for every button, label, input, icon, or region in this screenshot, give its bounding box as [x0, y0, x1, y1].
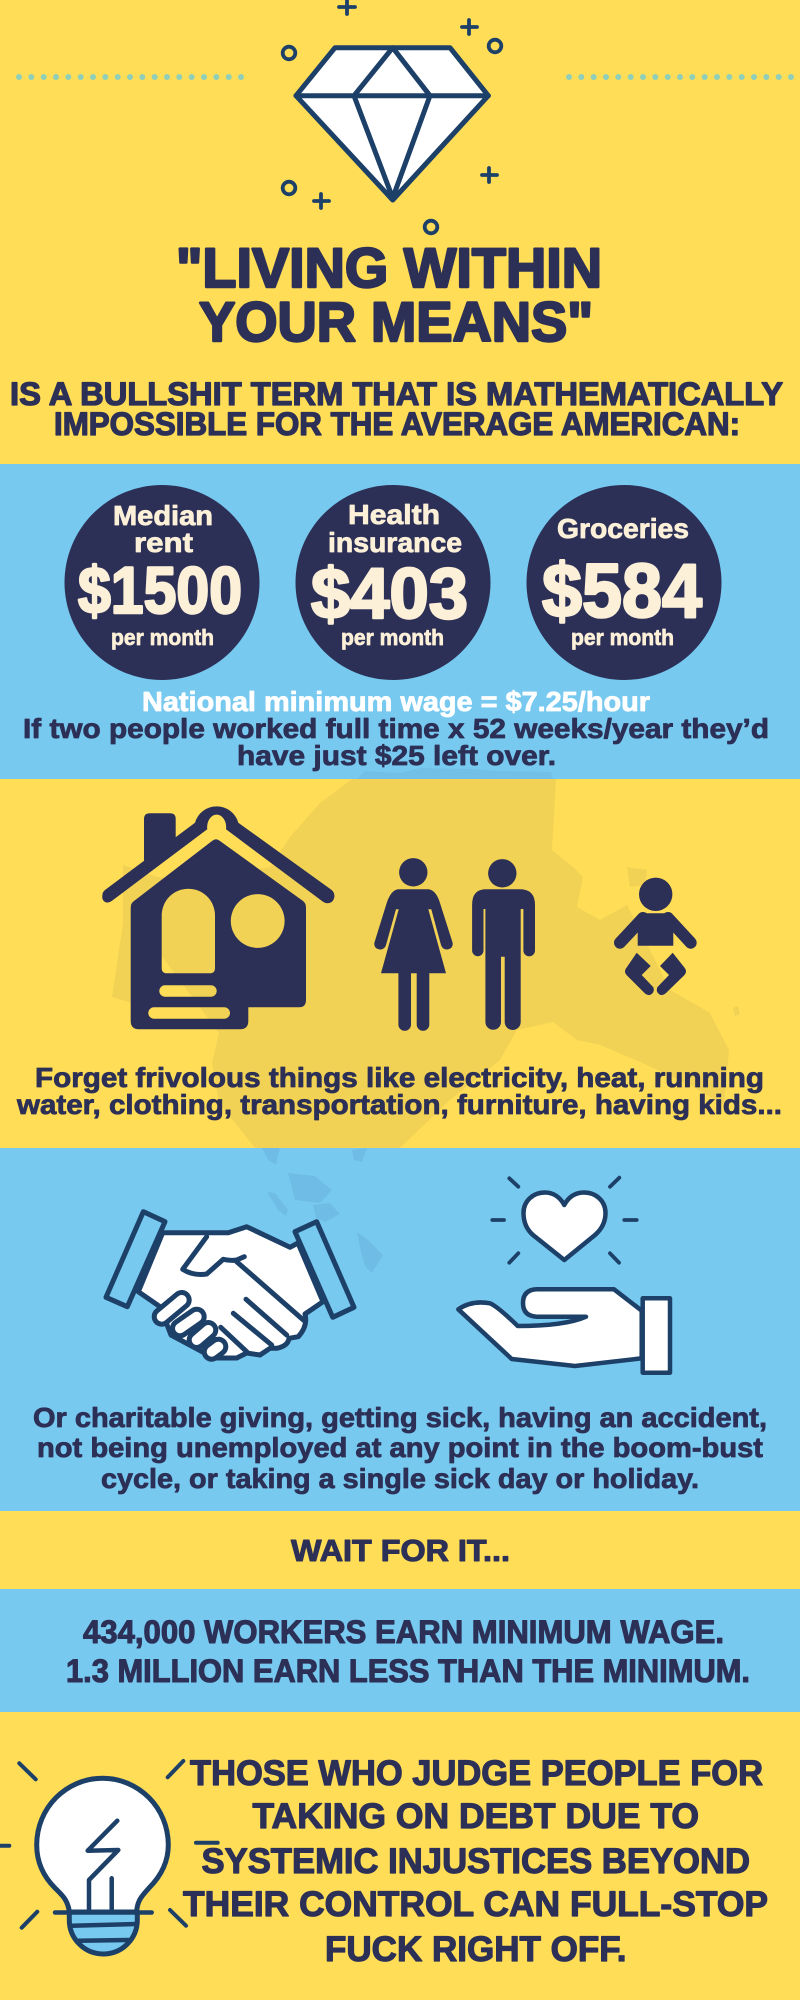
panel: workers: 434,000 WORKERS EARN MINIMUM WAGE. — [83, 1614, 724, 1650]
subtitle: IS A BULLSHIT TERM THAT IS MATHEMATICALLY — [10, 376, 783, 412]
icon: giving hand — [458, 1289, 670, 1373]
title: YOUR MEANS" — [199, 290, 593, 353]
conclusion text — [183, 1754, 768, 1969]
forget text: Forget frivolous things like electricity, heat, running — [35, 1062, 764, 1093]
map watermark — [112, 779, 740, 1148]
icon: woman — [374, 858, 453, 1031]
circle: health insurance: $403 — [311, 555, 468, 634]
conclusion text: SYSTEMIC INJUSTICES BEYOND — [202, 1842, 750, 1881]
icon: light bulb — [0, 1761, 218, 1954]
conclusion text: FUCK RIGHT OFF. — [325, 1930, 626, 1969]
panel: workers — [0, 1589, 800, 1712]
icon: heart — [492, 1178, 637, 1263]
icon: house — [102, 806, 334, 1029]
dotted rule left — [16, 74, 244, 80]
circle: groceries: $584 — [542, 549, 702, 634]
subtitle — [10, 376, 783, 442]
subtitle: IMPOSSIBLE FOR THE AVERAGE AMERICAN: — [54, 406, 740, 442]
dotted rule right — [566, 74, 794, 80]
charity text: not being unemployed at any point in the boom-bust — [37, 1432, 763, 1463]
panel: costs — [0, 464, 800, 779]
icon: sparkles — [283, 0, 501, 233]
icon: diamond — [296, 48, 488, 200]
conclusion text: THOSE WHO JUDGE PEOPLE FOR — [190, 1754, 763, 1793]
circle: rent: Median — [113, 500, 213, 531]
charity text — [33, 1402, 767, 1494]
forget text — [16, 1062, 782, 1120]
title: "LIVING WITHIN — [176, 236, 602, 299]
conclusion text: TAKING ON DEBT DUE TO — [252, 1797, 699, 1836]
minimum wage text: If two people worked full time x 52 weeks/year they’d — [23, 713, 769, 744]
minimum wage text — [23, 686, 769, 771]
circle: rent — [64, 485, 260, 680]
icon: handshake — [106, 1212, 354, 1358]
circle: health insurance: per month — [341, 625, 444, 650]
map watermark islands — [262, 1148, 383, 1273]
map watermark top — [357, 768, 553, 779]
panel: family — [0, 779, 800, 1148]
circle: rent: per month — [111, 625, 214, 650]
panel: conclusion — [0, 1712, 800, 2000]
circle: rent: $1500 — [78, 553, 242, 627]
minimum wage text: have just $25 left over. — [237, 740, 556, 771]
icon: man — [472, 859, 535, 1030]
circle: groceries: Groceries — [557, 513, 689, 544]
circle: health insurance: Health — [348, 499, 440, 530]
circle: groceries — [526, 485, 722, 680]
panel: workers: 1.3 MILLION EARN LESS THAN THE MINIMUM. — [66, 1653, 750, 1689]
conclusion text: THEIR CONTROL CAN FULL-STOP — [183, 1885, 768, 1924]
minimum wage text: National minimum wage = $7.25/hour — [142, 686, 650, 717]
panel: wait for it — [0, 1511, 800, 1588]
panel: giving — [0, 1148, 800, 1511]
panel: header — [0, 0, 800, 464]
circle: health insurance — [296, 485, 490, 680]
icon: baby — [620, 878, 691, 995]
charity text: Or charitable giving, getting sick, having an accident, — [33, 1402, 767, 1433]
charity text: cycle, or taking a single sick day or holiday. — [101, 1463, 699, 1494]
circle: rent: rent — [134, 527, 193, 558]
circle: groceries: per month — [571, 625, 674, 650]
title — [176, 236, 602, 353]
panel: wait for it: WAIT FOR IT... — [291, 1533, 510, 1568]
forget text: water, clothing, transportation, furniture, having kids... — [16, 1089, 782, 1120]
circle: health insurance: insurance — [328, 527, 462, 558]
